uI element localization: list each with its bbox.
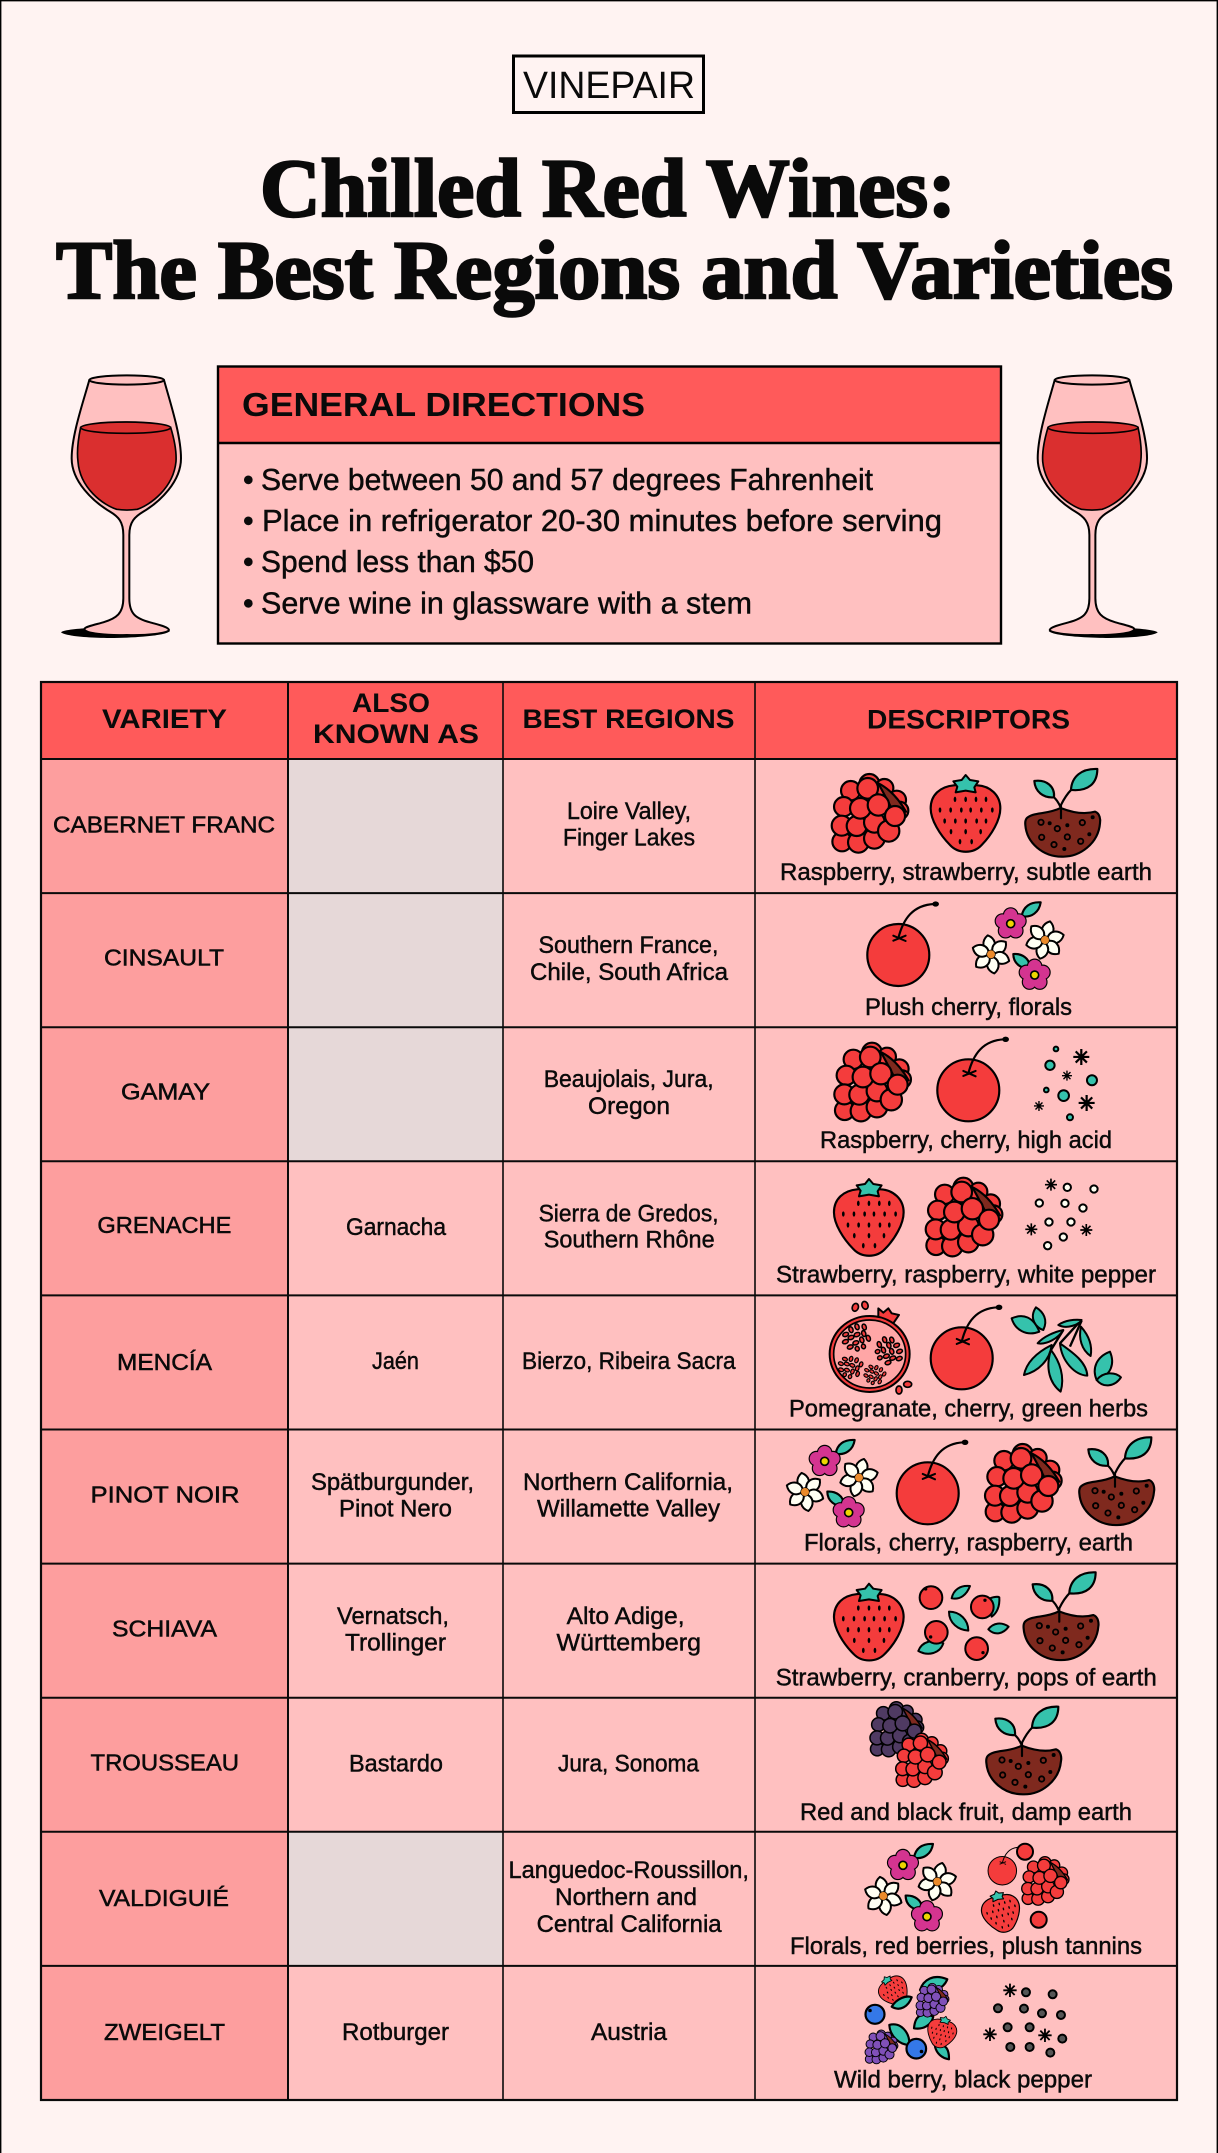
row: Schiava: SCHIAVA (112, 1616, 217, 1642)
icon: wild berries (865, 1968, 960, 2064)
row: Gamay: Beaujolais, Jura, (544, 1066, 714, 1093)
row: Mencía: Pomegranate, cherry, green herbs (789, 1396, 1148, 1423)
icon: cherry (937, 1037, 1009, 1121)
icon: cranberry (918, 1586, 1009, 1660)
row: Mencía: Jaén (372, 1348, 419, 1375)
row: Grenache: GRENACHE (97, 1212, 231, 1238)
row: Cabernet Franc: Loire Valley, (567, 798, 691, 825)
row: Schiava: Alto Adige, (567, 1603, 685, 1630)
row: Cinsault: Plush cherry, florals (865, 994, 1072, 1021)
row: Grenache: Strawberry, raspberry, white pepper (776, 1262, 1156, 1289)
row: Valdiguié: Florals, red berries, plush tannins (790, 1933, 1142, 1960)
icon: earth (1024, 1572, 1099, 1660)
heading: general directions: GENERAL DIRECTIONS (242, 387, 645, 424)
icon: earth (1079, 1437, 1154, 1525)
logo: VinePair: VINEPAIR (523, 65, 695, 107)
icon: strawberry (834, 1584, 904, 1660)
icon: red berries (977, 1844, 1069, 1937)
row: Pinot Noir: Willamette Valley (537, 1496, 721, 1523)
row: Pinot Noir: Northern California, (523, 1469, 733, 1496)
icon: cherry (867, 901, 939, 986)
row: Valdiguié (41, 1832, 1177, 1966)
table header row: VARIETY (102, 704, 227, 734)
icon: florals (861, 1844, 961, 1930)
directions list: Serve wine in glassware with a stem (261, 586, 752, 620)
logo: VinePair (514, 56, 704, 112)
row: Zweigelt: Wild berry, black pepper (834, 2067, 1092, 2094)
row: Schiava: Vernatsch, (337, 1603, 449, 1630)
row: Grenache: Southern Rhône (544, 1227, 715, 1254)
title: Chilled Red Wines: (260, 142, 956, 234)
row: Pinot Noir: Florals, cherry, raspberry, earth (804, 1530, 1133, 1557)
table header row: BEST REGIONS (522, 704, 734, 734)
icon: left wine glass (61, 375, 181, 638)
icon: raspberry (832, 774, 908, 853)
row: Pinot Noir: Spätburgunder, (311, 1469, 474, 1496)
title (56, 142, 1173, 316)
row: Valdiguié: VALDIGUIÉ (99, 1885, 229, 1911)
icon: raspberry (985, 1444, 1062, 1523)
row: Cinsault: CINSAULT (104, 944, 224, 970)
directions list: • (243, 586, 254, 620)
row: Cabernet Franc (41, 759, 1177, 893)
row: Valdiguié: Northern and (555, 1884, 697, 1911)
icon: strawberry (834, 1179, 904, 1256)
icon: high acid (1034, 1047, 1097, 1120)
icon: white pepper (1025, 1179, 1098, 1249)
row: Cinsault (41, 893, 1177, 1027)
row: Mencía: MENCÍA (117, 1349, 212, 1375)
directions list: Place in refrigerator 20-30 minutes before serving (262, 504, 942, 538)
row: Trousseau: Red and black fruit, damp earth (800, 1799, 1132, 1826)
row: Grenache: Sierra de Gredos, (539, 1201, 719, 1228)
icon: pomegranate (830, 1301, 912, 1394)
row: Grenache: Garnacha (346, 1214, 446, 1241)
icon: strawberry (931, 775, 1000, 852)
icon: cherry (897, 1440, 968, 1524)
title: The Best Regions and Varieties (56, 224, 1173, 316)
row: Cabernet Franc: Finger Lakes (563, 825, 695, 852)
row: Mencía: Bierzo, Ribeira Sacra (522, 1348, 736, 1375)
row: Valdiguié: Central California (537, 1911, 722, 1938)
table header row: KNOWN AS (313, 719, 479, 749)
icon: black pepper (983, 1984, 1066, 2057)
directions list: • (243, 463, 254, 497)
row: Pinot Noir (41, 1430, 1177, 1564)
row: Cabernet Franc: CABERNET FRANC (53, 812, 275, 838)
row: Schiava: Trollinger (345, 1630, 446, 1657)
row: Gamay: Raspberry, cherry, high acid (820, 1127, 1112, 1154)
row: Schiava: Württemberg (556, 1630, 701, 1657)
row: Zweigelt: Rotburger (342, 2019, 449, 2046)
panel: general directions (218, 366, 1001, 644)
icon: raspberry (834, 1043, 911, 1121)
row: Cabernet Franc: Raspberry, strawberry, subtle earth (780, 859, 1152, 886)
row: Trousseau (41, 1698, 1177, 1832)
icon: red and black fruit (870, 1702, 948, 1787)
directions list (243, 463, 942, 620)
icon: earth (1025, 769, 1100, 857)
row: Gamay (41, 1027, 1177, 1161)
row: Mencía (41, 1295, 1177, 1430)
row: Trousseau: Jura, Sonoma (558, 1751, 699, 1778)
directions list: Spend less than $50 (261, 545, 534, 579)
icon: florals (968, 902, 1069, 989)
icon: right wine glass (1038, 375, 1158, 638)
directions list: Serve between 50 and 57 degrees Fahrenheit (261, 463, 874, 497)
row: Zweigelt (41, 1966, 1177, 2100)
icon: green herbs (1012, 1307, 1121, 1392)
row: Trousseau: Bastardo (349, 1751, 443, 1778)
icon: florals (782, 1440, 883, 1526)
row: Zweigelt: ZWEIGELT (104, 2019, 225, 2045)
directions list: • (243, 504, 254, 538)
row: Schiava (41, 1564, 1177, 1698)
row: Gamay: GAMAY (121, 1078, 210, 1104)
icon: earth (986, 1707, 1061, 1794)
table header row (41, 682, 1177, 759)
icon: cherry (931, 1305, 1002, 1389)
row: Pinot Noir: PINOT NOIR (90, 1482, 240, 1508)
table header row: DESCRIPTORS (867, 704, 1070, 734)
table: varieties (41, 682, 1177, 2100)
directions list: • (243, 545, 254, 579)
row: Valdiguié: Languedoc-Roussillon, (508, 1857, 749, 1884)
row: Zweigelt: Austria (591, 2019, 667, 2046)
row: Grenache (41, 1161, 1177, 1295)
row: Cinsault: Chile, South Africa (530, 959, 728, 986)
row: Pinot Noir: Pinot Nero (339, 1496, 452, 1523)
table header row: ALSO (352, 688, 430, 718)
row: Cinsault: Southern France, (538, 932, 718, 959)
row: Schiava: Strawberry, cranberry, pops of earth (776, 1665, 1157, 1692)
row: Trousseau: TROUSSEAU (90, 1750, 239, 1776)
row: Gamay: Oregon (588, 1093, 670, 1120)
icon: raspberry (926, 1178, 1002, 1256)
